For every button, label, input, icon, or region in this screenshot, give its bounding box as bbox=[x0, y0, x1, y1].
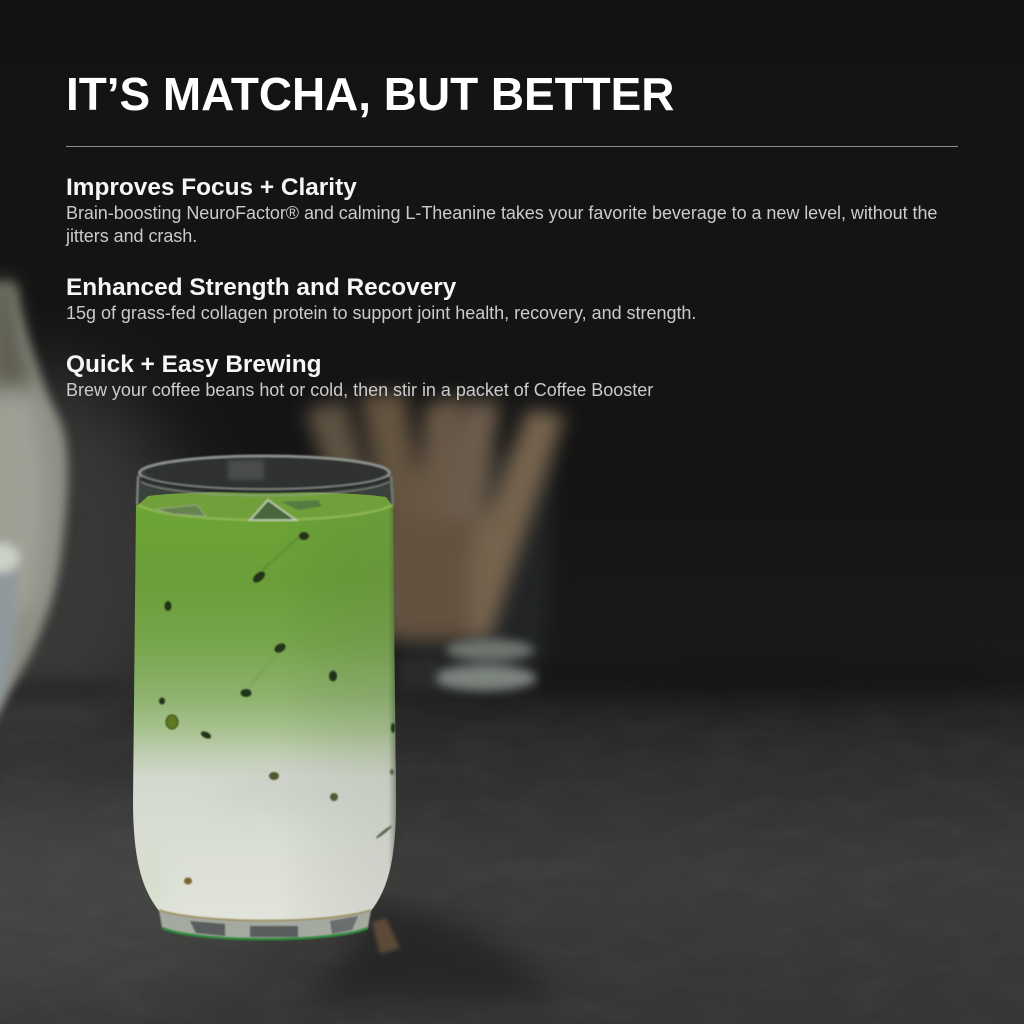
benefit: strength and recovery: 15g of grass-fed collagen protein to support joint health, recovery, and strength. bbox=[66, 303, 696, 323]
brown spot on table bbox=[372, 918, 400, 954]
benefit: brewing: Quick + Easy Brewing bbox=[66, 351, 322, 378]
glass and drink bbox=[127, 456, 396, 939]
blurred small glass bbox=[395, 450, 555, 688]
milk shading bbox=[220, 768, 360, 812]
blurred stirrer sticks bbox=[305, 392, 565, 640]
benefit: strength and recovery bbox=[66, 274, 696, 323]
seeds bbox=[159, 532, 395, 884]
blurred small glass base bbox=[398, 639, 537, 691]
benefit: focus and clarity: jitters and crash. bbox=[66, 226, 197, 246]
benefit: strength and recovery: Enhanced Strength and Recovery bbox=[66, 274, 456, 301]
rim bbox=[137, 456, 393, 505]
drink body bbox=[133, 505, 396, 921]
benefit: focus and clarity: Brain-boosting NeuroFactor® and calming L-Theanine takes your favorite beverage to a new level, without the bbox=[66, 203, 937, 223]
blurred white cup bbox=[0, 565, 17, 730]
divider bbox=[66, 146, 958, 147]
benefit: focus and clarity bbox=[66, 174, 937, 246]
glass body above the drink bbox=[136, 456, 393, 510]
ice cubes bbox=[156, 500, 322, 520]
photo background: matcha latte glass on dark table bbox=[0, 270, 1024, 1024]
blurred jug at left bbox=[0, 285, 68, 720]
title: IT’S MATCHA, BUT BETTER bbox=[66, 68, 674, 120]
benefit: brewing: Brew your coffee beans hot or cold, then stir in a packet of Coffee Booster bbox=[66, 380, 653, 400]
drink surface bbox=[138, 492, 392, 522]
table texture bbox=[0, 660, 1024, 1024]
benefit: focus and clarity: Improves Focus + Clarity bbox=[66, 174, 357, 201]
benefit: brewing bbox=[66, 351, 653, 400]
glass base bbox=[159, 910, 371, 939]
cast shadow of glass bbox=[300, 905, 560, 1000]
